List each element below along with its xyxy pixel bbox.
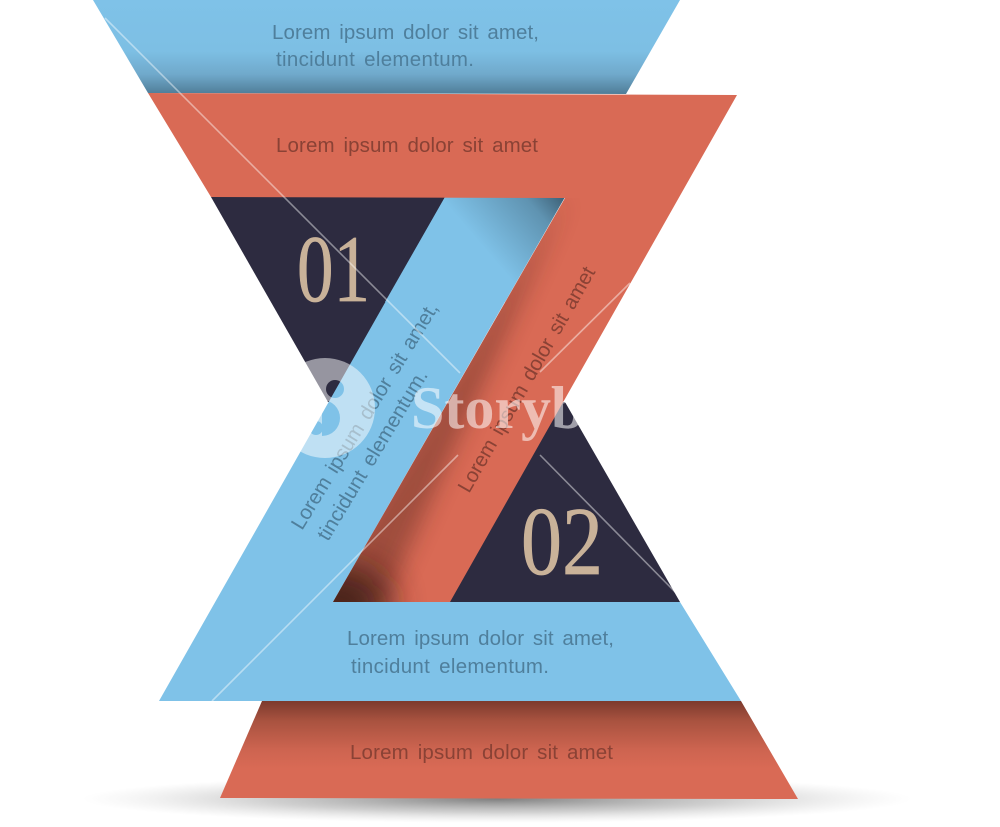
watermark text: Storyb (411, 375, 584, 441)
text: top blue label: tincidunt elementum. (276, 48, 474, 71)
panel: top blue trapezoid (93, 0, 680, 94)
text: top red label: Lorem ipsum dolor sit amet (276, 134, 538, 157)
text: bottom blue label (347, 627, 614, 678)
number 01: 01 (297, 216, 370, 322)
number 02: 02 (521, 488, 603, 595)
panel: blue ribbon (159, 197, 741, 701)
text: bottom blue label: tincidunt elementum. (351, 655, 549, 678)
text: top blue label (272, 21, 539, 71)
text: bottom red label: Lorem ipsum dolor sit amet (350, 741, 613, 764)
panel: bottom red trapezoid (220, 701, 798, 799)
text: diagonal blue label: tincidunt elementum. (313, 366, 433, 545)
watermark logo (300, 358, 375, 458)
panel: red ribbon (148, 93, 737, 645)
text: diagonal red label: Lorem ipsum dolor sit amet (453, 262, 600, 496)
text: diagonal blue label: Lorem ipsum dolor sit amet, (287, 298, 443, 534)
ribbon top shadow (385, 197, 565, 302)
watermark (105, 18, 680, 701)
text: top blue label: Lorem ipsum dolor sit amet, (272, 21, 539, 44)
ribbon inner shadow (333, 216, 560, 602)
dark triangle 02 (440, 402, 680, 603)
text: bottom blue label: Lorem ipsum dolor sit amet, (347, 627, 614, 650)
ground shadow (82, 775, 912, 823)
dark triangle 01 (211, 197, 450, 402)
